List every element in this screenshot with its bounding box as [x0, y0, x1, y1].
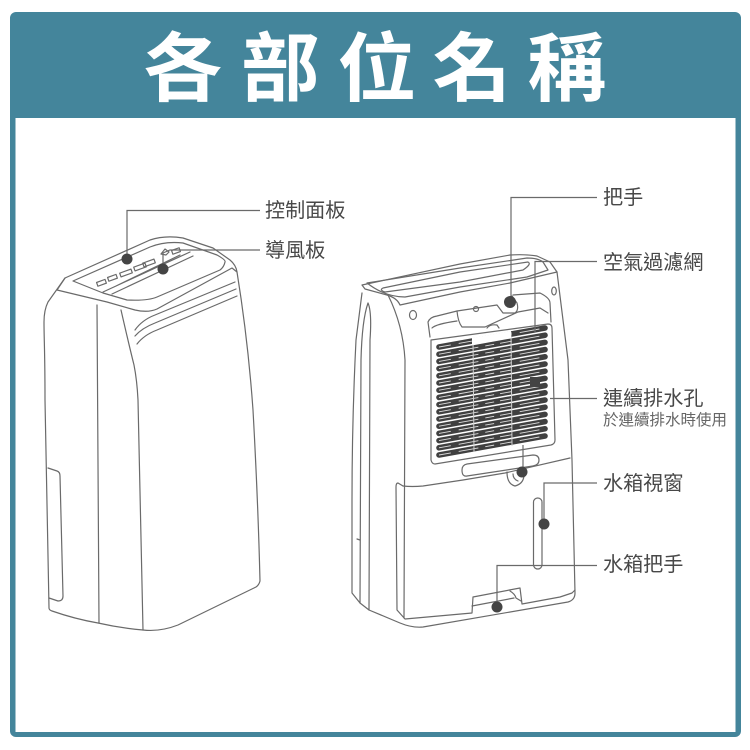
- screw holes: [410, 310, 416, 320]
- upper rear panel: [428, 293, 551, 337]
- lid opening: [381, 262, 529, 292]
- front unit lid: [57, 237, 237, 311]
- callout: tank handle: [492, 553, 683, 612]
- grille column ribs: [473, 332, 512, 452]
- filter grille slats: [439, 328, 545, 455]
- drain hole: [507, 472, 524, 486]
- callout: tank window: 水箱視窗: [603, 472, 683, 495]
- filter grille panel: [431, 324, 555, 464]
- panel buttons: [97, 248, 180, 286]
- callout: handle: [504, 186, 643, 308]
- white content panel: [16, 118, 736, 732]
- grille highlights: [439, 328, 545, 455]
- top grille gap: [472, 331, 511, 345]
- rear body inner lines: [360, 295, 405, 618]
- front unit body: [44, 272, 260, 630]
- lid rim: [367, 258, 548, 297]
- rear unit lid: [362, 255, 557, 305]
- rear unit body: [352, 272, 575, 627]
- title: 各部位名稱: [144, 28, 606, 112]
- control panel surface: [73, 242, 225, 300]
- tank top edge: [403, 458, 570, 486]
- callout: continuous drain hole: [516, 387, 727, 478]
- louver outlet: [103, 252, 193, 294]
- tank handle: [472, 591, 521, 606]
- callout: control panel: [122, 199, 345, 264]
- callout: tank window: [538, 472, 683, 530]
- callout: air filter: 空氣過濾網: [603, 251, 703, 274]
- handle recess: [457, 296, 518, 327]
- water tank: [396, 483, 575, 619]
- callout: air filter: [530, 251, 703, 387]
- callout: air louver: 導風板: [265, 239, 325, 262]
- lower pill slot: [462, 455, 539, 476]
- callout: air louver: [158, 239, 325, 274]
- side vents: [135, 282, 237, 344]
- callout: handle: 把手: [603, 186, 643, 209]
- callout: continuous drain hole: 於連續排水時使用: [603, 411, 727, 429]
- callout: control panel: 控制面板: [265, 199, 345, 222]
- side water window: [48, 468, 63, 601]
- front dehumidifier illustration: [44, 237, 260, 630]
- callout: tank handle: 水箱把手: [603, 553, 683, 576]
- side slot: [357, 539, 360, 540]
- tank window: [534, 498, 542, 569]
- callout: continuous drain hole: 連續排水孔: [603, 387, 703, 410]
- body edge lines: [97, 305, 143, 630]
- rear dehumidifier illustration: [352, 255, 575, 627]
